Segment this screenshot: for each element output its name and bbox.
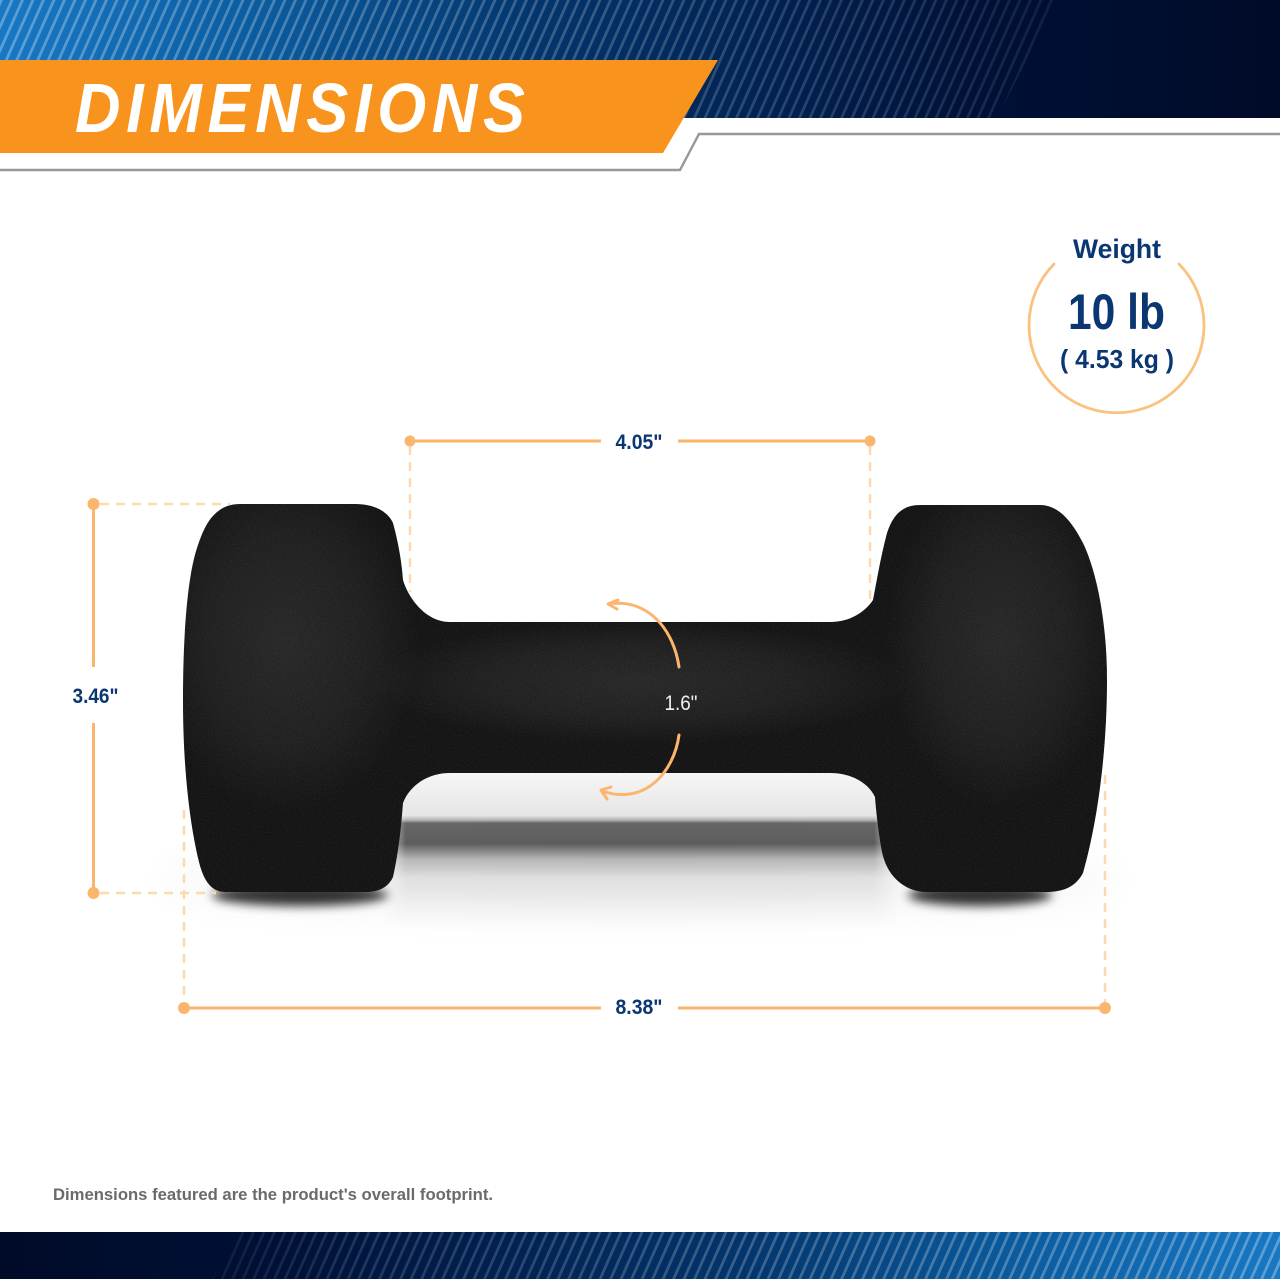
footnote: Dimensions featured are the product's overall footprint. [53,1186,493,1204]
upper arrow [608,600,679,667]
weight value: 10 lb [1068,284,1165,340]
handle circumference: 1.6 in [601,600,698,799]
left dimension: 3.46 in [72,498,230,899]
right head highlight [918,519,1082,761]
header banner [0,0,1280,118]
weight ring [1029,264,1204,413]
title: DIMENSIONS [75,70,525,148]
lower arrow [601,735,679,799]
dumbbell [183,504,1107,892]
weight label: Weight [1073,234,1161,264]
handle highlight [448,638,832,726]
bottom dimension: 8.38 in: 8.38" [616,996,662,1019]
header rule [0,134,1280,170]
top dimension: 4.05 in: 4.05" [616,431,662,454]
weight badge [1029,234,1204,413]
bottom dimension: 8.38 in [178,775,1111,1019]
left dimension: 3.46 in: 3.46" [72,685,118,708]
title banner [0,60,718,153]
left head highlight [189,516,381,764]
circumference label: 1.6" [664,692,698,715]
dumbbell shadow [205,773,1060,918]
top dimension: 4.05 in [404,431,876,600]
footer band [0,1232,1280,1279]
weight metric: ( 4.53 kg ) [1060,344,1174,374]
